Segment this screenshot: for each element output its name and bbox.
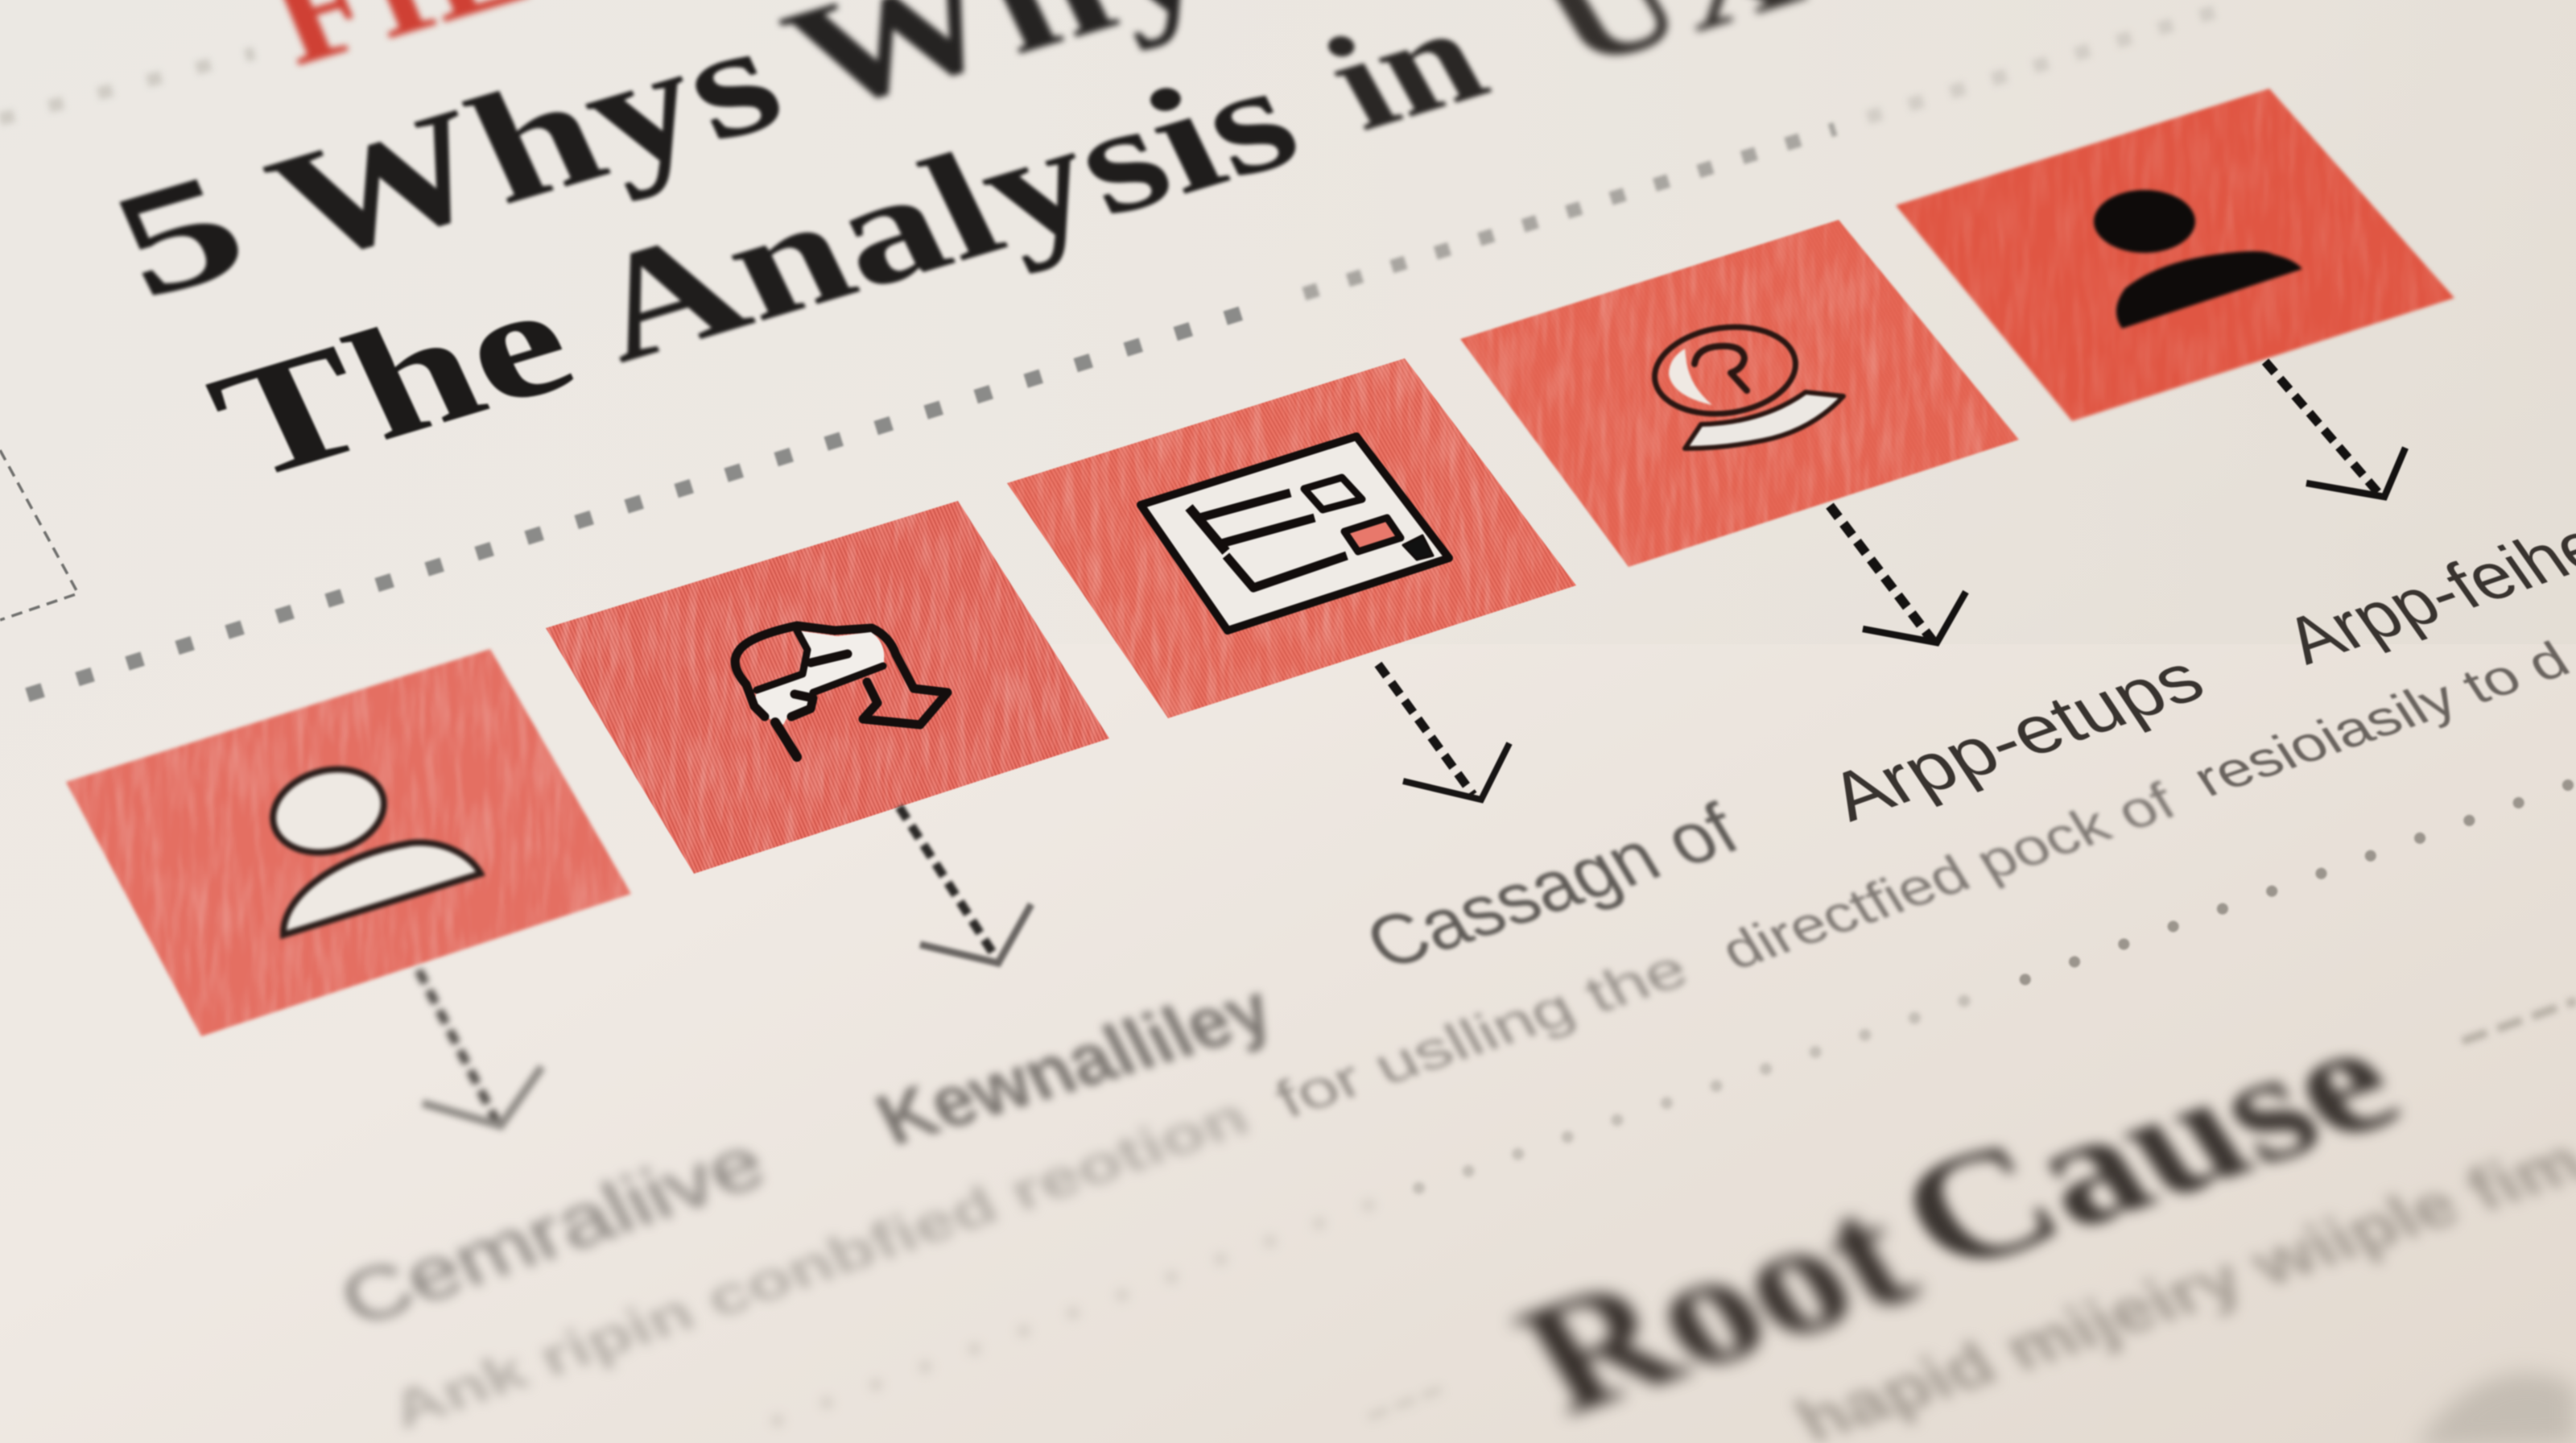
step label 2: Kewnalliley	[863, 967, 1286, 1160]
description middle left part: for uslling the	[1265, 940, 1698, 1129]
title word: 5: 5	[89, 141, 270, 331]
panel: why 2 square	[546, 501, 1109, 874]
icon: outlined person	[263, 758, 481, 935]
blurred icon at lower right	[2415, 1373, 2576, 1443]
description line	[381, 631, 2576, 1440]
arrow 4	[1830, 506, 1966, 643]
dashed box corner at left	[0, 450, 78, 620]
icon: interface wireframe with cursor	[1141, 436, 1449, 631]
lower dotted divider	[765, 785, 2568, 1425]
title	[89, 0, 1827, 514]
description left part: Ank ripin conbfied reotion	[381, 1087, 1258, 1440]
icon: question bubble on base	[1649, 318, 1843, 449]
icon: solid person	[2094, 190, 2302, 329]
left dashed fragment	[1368, 1389, 1441, 1417]
main dotted divider	[27, 10, 2222, 695]
icon: brain with arrow	[735, 626, 947, 757]
panel: why 1 square	[66, 649, 631, 1036]
arrow 5	[2265, 362, 2405, 497]
panel: why 3 square	[1007, 358, 1576, 718]
panel: why 4 square	[1460, 220, 2019, 567]
description right part: resioiasily to d	[2182, 631, 2576, 807]
panel: why 5 square	[1896, 89, 2454, 421]
heading word: Cause: Cause	[1864, 990, 2429, 1304]
title word: The: The	[187, 251, 597, 514]
title word: Analysis: Analysis	[559, 31, 1323, 394]
top dotted divider	[0, 53, 254, 119]
title word: Whys: Whys	[245, 0, 806, 296]
heading: Root Cause	[1488, 990, 2429, 1443]
arrow 2	[899, 807, 1031, 963]
step label 1: Cemraliive	[326, 1120, 778, 1342]
right dashed fragment	[2462, 1001, 2576, 1041]
step label 4: Arpp-etups	[1814, 639, 2218, 835]
heading word: Root: Root	[1488, 1164, 1942, 1443]
arrow 3	[1378, 664, 1509, 800]
arrow 1	[419, 970, 542, 1126]
description middle right part: directfied pock of	[1711, 773, 2186, 981]
step label 3: Cassagn of	[1351, 788, 1752, 984]
